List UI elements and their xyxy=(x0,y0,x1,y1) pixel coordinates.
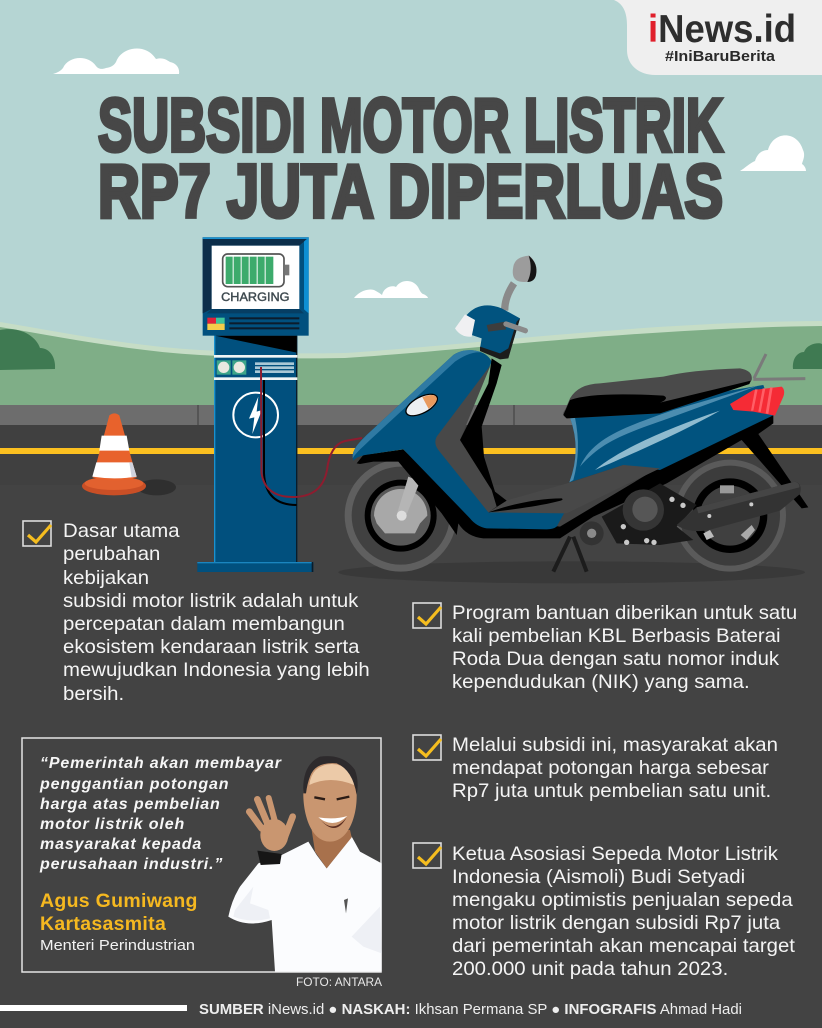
text block: Ketua Asosiasi Sepeda Motor Listrik xyxy=(452,844,778,865)
text block: kependudukan (NIK) yang sama. xyxy=(452,672,750,693)
quote text: perusahaan industri.” xyxy=(39,856,223,873)
icon: cloud right xyxy=(740,135,806,171)
quote text: motor listrik oleh xyxy=(40,816,185,833)
icon: tail light xyxy=(730,387,784,416)
text block: mengaku optimistis penjualan sepeda xyxy=(452,890,793,911)
front wheel xyxy=(345,460,457,572)
quote text: penggantian potongan xyxy=(39,776,229,793)
text block: perubahan xyxy=(63,544,160,565)
text block: Rp7 juta untuk pembelian satu unit. xyxy=(452,781,771,802)
speaker name: Kartasasmita xyxy=(40,913,166,935)
speaker name xyxy=(40,890,198,954)
text block xyxy=(452,735,778,802)
rear body panel xyxy=(569,385,774,482)
rear wheel xyxy=(674,460,786,572)
panel: quote xyxy=(22,738,382,972)
inner panel xyxy=(435,358,660,513)
bullet 2 xyxy=(413,603,797,693)
icon: front lamp xyxy=(402,389,442,421)
text block xyxy=(452,844,795,980)
speaker name: Menteri Perindustrian xyxy=(40,937,195,954)
title xyxy=(98,83,723,233)
seat xyxy=(563,368,752,418)
watch xyxy=(257,851,282,865)
text block: Roda Dua dengan satu nomor induk xyxy=(452,649,779,670)
bullet 1 xyxy=(23,521,370,705)
kickstand xyxy=(553,537,587,572)
icon: lightning in circle xyxy=(233,393,278,437)
engine xyxy=(580,483,697,545)
station pole xyxy=(214,336,297,562)
portrait xyxy=(228,756,382,972)
photo credit: FOTO: ANTARA xyxy=(296,977,382,989)
icon: checkbox xyxy=(413,603,441,628)
text block: Melalui subsidi ini, masyarakat akan xyxy=(452,735,778,756)
quote text xyxy=(39,755,282,873)
muffler xyxy=(677,482,801,531)
text block: Program bantuan diberikan untuk satu xyxy=(452,603,797,624)
footer bar xyxy=(0,1005,187,1011)
quote text: harga atas pembelian xyxy=(40,796,221,813)
station screen head xyxy=(203,237,309,336)
icon: checkbox xyxy=(23,521,51,546)
station screen head: CHARGING xyxy=(221,291,289,304)
text block: motor listrik dengan subsidi Rp7 juta xyxy=(452,913,780,934)
logo panel: iNews.id xyxy=(648,8,796,51)
text block: mendapat potongan harga sebesar xyxy=(452,758,769,779)
text block: kebijakan xyxy=(63,568,149,589)
quote text: “Pemerintah akan membayar xyxy=(40,755,282,772)
charging cable xyxy=(261,367,362,497)
icon: checkbox xyxy=(413,735,441,760)
text block xyxy=(452,603,797,693)
quote text: masyarakat kepada xyxy=(40,836,202,853)
logo panel: #IniBaruBerita xyxy=(665,49,776,65)
text block: ekosistem kendaraan listrik serta xyxy=(63,637,360,658)
bullet 3 xyxy=(413,735,778,802)
rear rack xyxy=(753,354,805,379)
hand xyxy=(249,798,293,851)
speaker name: Agus Gumiwang xyxy=(40,890,198,912)
text block: subsidi motor listrik adalah untuk xyxy=(63,591,359,612)
icon: traffic cone xyxy=(82,413,176,495)
shirt xyxy=(228,837,382,972)
logo panel xyxy=(614,0,822,75)
electric scooter xyxy=(338,256,808,583)
icon: bush left xyxy=(0,329,55,370)
text block: dari pemerintah akan mencapai target xyxy=(452,936,795,957)
ground shadow xyxy=(338,561,805,583)
neck xyxy=(312,830,352,868)
text block xyxy=(63,521,370,705)
icon: cloud top left xyxy=(53,49,179,74)
front shield xyxy=(353,350,607,529)
icon: bush right xyxy=(793,343,822,369)
text block: 200.000 unit pada tahun 2023. xyxy=(452,959,728,980)
footer credits: SUMBER iNews.id ● NASKAH: Ikhsan Permana SP ● INFOGRAFIS Ahmad Hadi xyxy=(199,1002,742,1018)
face xyxy=(303,758,357,842)
text block: percepatan dalam membangun xyxy=(63,614,345,635)
text block: bersih. xyxy=(63,684,124,705)
text block: kali pembelian KBL Berbasis Baterai xyxy=(452,626,781,647)
text block: mewujudkan Indonesia yang lebih xyxy=(63,660,370,681)
bullet 4 xyxy=(413,843,795,980)
icon: checkbox xyxy=(413,843,441,868)
charging station xyxy=(197,237,313,572)
handlebar head xyxy=(455,305,525,359)
mirror xyxy=(505,256,536,311)
text block: Dasar utama xyxy=(63,521,180,542)
black frame xyxy=(357,413,808,538)
station base xyxy=(197,562,313,572)
text block: Indonesia (Aismoli) Budi Setyadi xyxy=(452,867,745,888)
icon: cloud middle xyxy=(354,281,428,298)
